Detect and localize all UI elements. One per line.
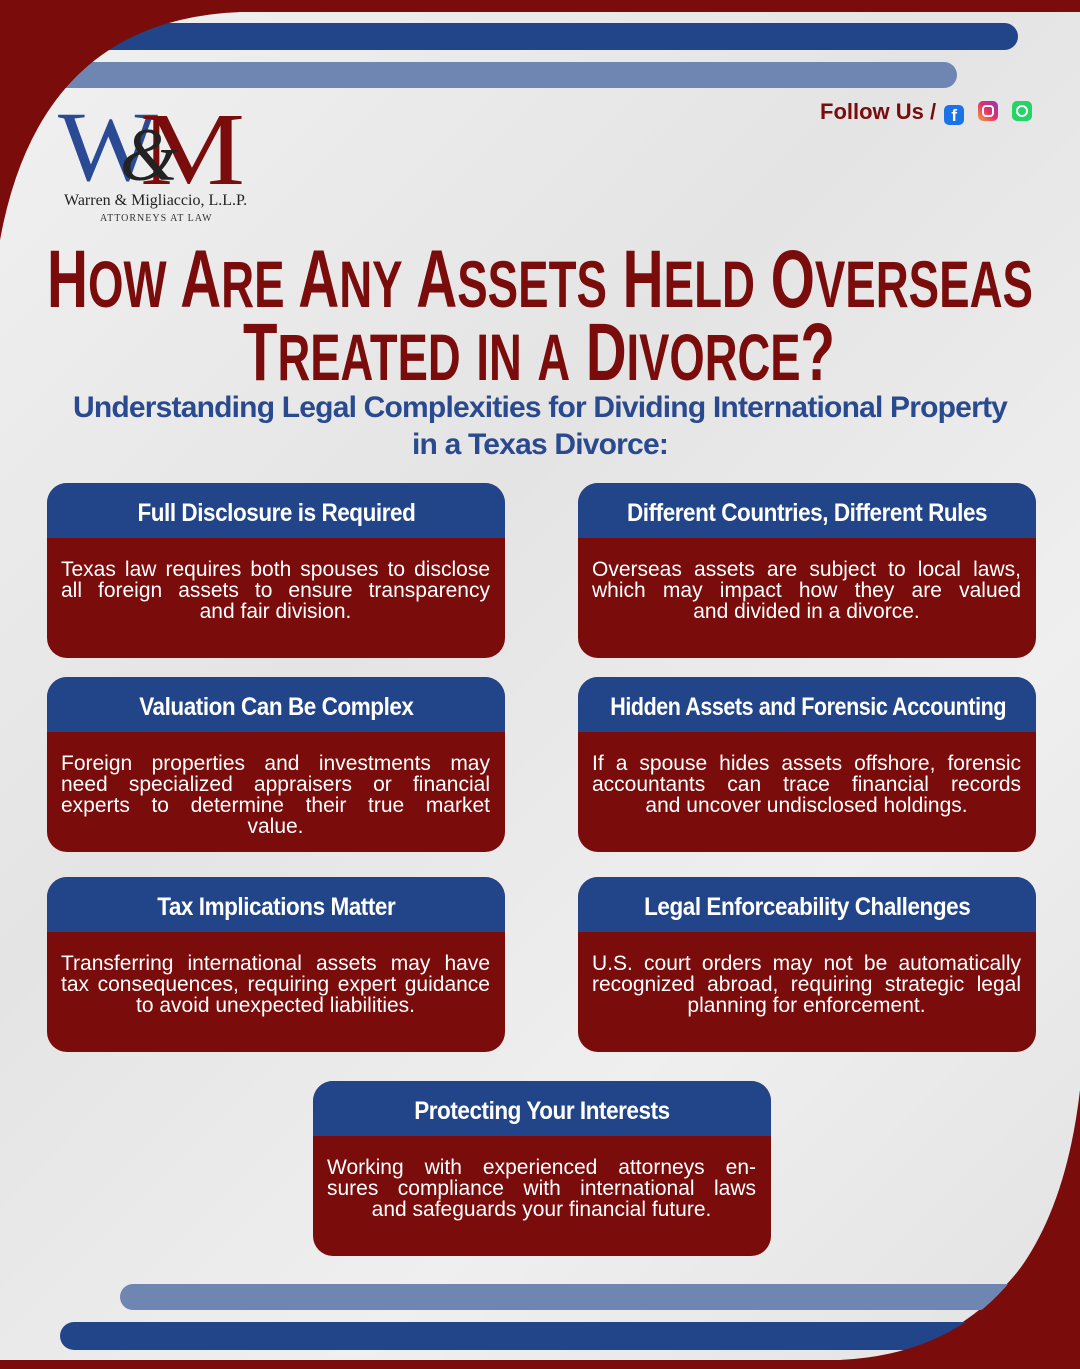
subtitle: in a Texas Divorce: <box>412 428 668 461</box>
card: protecting interests: and safeguards your financial future. <box>372 1198 711 1221</box>
card: hidden assets: Hidden Assets and Forensic Accounting <box>610 693 1006 721</box>
card: valuation: need specialized appraisers or financial <box>61 773 490 796</box>
card: tax <box>47 877 505 1052</box>
card: protecting interests: Working with experienced attorneys en- <box>327 1156 756 1179</box>
subtitle: Understanding Legal Complexities for Dividing International Property <box>73 391 1007 424</box>
card: hidden assets <box>578 677 1036 852</box>
bottom light bar <box>120 1284 1080 1310</box>
card: enforceability: Legal Enforceability Challenges <box>644 893 970 921</box>
bottom dark bar <box>60 1322 1080 1350</box>
card: enforceability <box>578 877 1036 1052</box>
card: valuation: Foreign properties and investments may <box>61 752 490 775</box>
card: different countries: which may impact how they are valued <box>592 579 1021 602</box>
card: full disclosure: and fair division. <box>200 600 351 623</box>
card: full disclosure: Full Disclosure is Required <box>137 499 415 527</box>
card: enforceability: planning for enforcement. <box>687 994 926 1017</box>
card: tax: Tax Implications Matter <box>157 893 395 921</box>
follow us <box>820 99 1032 125</box>
icon: facebook: f <box>951 106 957 125</box>
card: protecting interests <box>313 1081 771 1256</box>
card: enforceability: recognized abroad, requiring strategic legal <box>592 973 1021 996</box>
card: valuation: experts to determine their true market <box>61 794 490 817</box>
title <box>47 235 1033 385</box>
card: tax: Transferring international assets may have <box>61 952 490 975</box>
card: valuation: value. <box>247 815 304 838</box>
logo: Warren & Migliaccio, L.L.P. <box>64 192 247 209</box>
subtitle <box>73 391 1008 461</box>
icon: instagram <box>978 101 998 121</box>
card: full disclosure: Texas law requires both spouses to disclose <box>61 558 490 581</box>
card: different countries: and divided in a divorce. <box>693 600 920 623</box>
top red corner overlay <box>0 12 240 240</box>
card: hidden assets: If a spouse hides assets offshore, forensic <box>592 752 1021 775</box>
card: different countries <box>578 483 1036 658</box>
card: enforceability: U.S. court orders may not be automatically <box>592 952 1021 975</box>
card: hidden assets: accountants can trace financial records <box>592 773 1021 796</box>
card: full disclosure <box>47 483 505 658</box>
bottom red corner overlay <box>840 1090 1080 1360</box>
card: protecting interests: sures compliance with international laws <box>327 1177 756 1200</box>
top light bar <box>35 62 957 88</box>
card: valuation <box>47 677 505 852</box>
card: full disclosure: all foreign assets to ensure transparency <box>61 579 490 602</box>
card: protecting interests: Protecting Your Interests <box>414 1097 670 1125</box>
icon: whatsapp <box>1012 101 1032 121</box>
top dark bar <box>70 23 1018 50</box>
logo: ATTORNEYS AT LAW <box>100 213 213 224</box>
card: tax: to avoid unexpected liabilities. <box>136 994 415 1017</box>
card: tax: tax consequences, requiring expert guidance <box>61 973 490 996</box>
follow us: Follow Us / <box>820 99 936 124</box>
card: hidden assets: and uncover undisclosed holdings. <box>645 794 968 817</box>
icon: facebook <box>944 105 964 125</box>
logo <box>58 100 247 224</box>
card: different countries: Overseas assets are subject to local laws, <box>592 558 1021 581</box>
card: different countries: Different Countries, Different Rules <box>627 499 987 527</box>
card: valuation: Valuation Can Be Complex <box>139 693 413 721</box>
